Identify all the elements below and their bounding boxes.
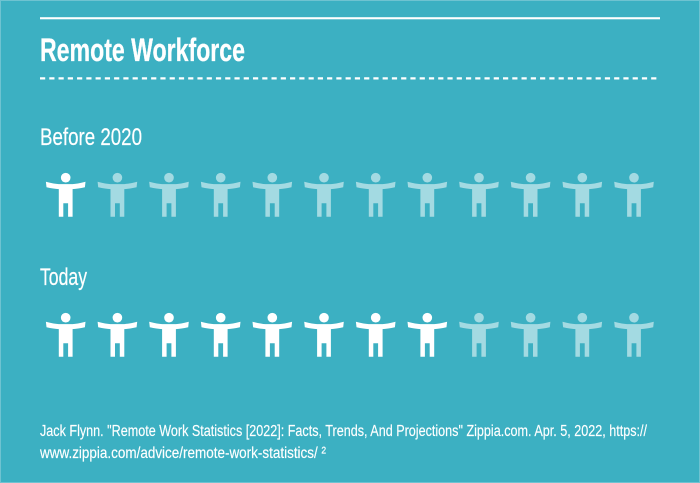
pictogram row: before 2020 — [46, 173, 654, 217]
label: today: Today — [40, 264, 87, 291]
pictogram row: today — [46, 313, 654, 357]
title: Remote Workforce — [40, 32, 245, 68]
source citation — [39, 423, 647, 462]
source citation: www.zippia.com/advice/remote-work-statistics/ ² — [39, 445, 327, 462]
label: before 2020: Before 2020 — [40, 124, 142, 151]
